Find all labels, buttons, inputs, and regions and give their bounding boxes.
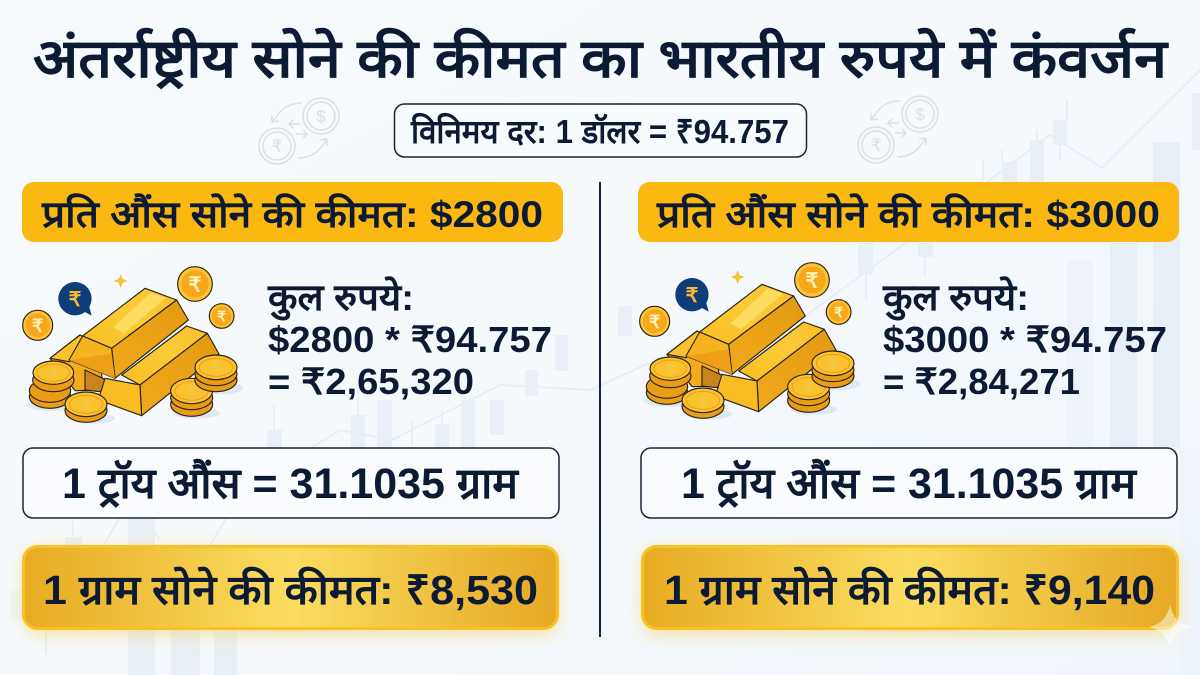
icon: gold bars and coins: ₹ xyxy=(805,269,819,292)
icon: currency exchange right: ₹ xyxy=(871,136,881,155)
text block: total rupees xyxy=(882,276,1167,402)
text block: total rupees: $3000 * ₹94.757 xyxy=(883,319,1167,360)
icon: gold bars and coins: ₹ xyxy=(649,312,661,332)
troy ounce box xyxy=(641,448,1177,518)
icon: gold bars and coins: ₹ xyxy=(32,316,44,336)
heading: price per ounce $2800: प्रति औंस सोने की कीमत: $2800 xyxy=(41,193,543,235)
heading: price per ounce $3000 xyxy=(638,182,1179,242)
icon: gold bars and coins: $ xyxy=(699,393,707,409)
icon: gold bars and coins: ₹ xyxy=(686,285,699,307)
icon: currency exchange right: $ xyxy=(915,105,925,124)
troy ounce box: 1 ट्रॉय औंस = 31.1035 ग्राम xyxy=(62,458,519,508)
icon: sparkle watermark xyxy=(1149,605,1192,647)
icon: gold bars and coins: $ xyxy=(49,366,57,382)
troy ounce box xyxy=(23,448,559,518)
icon: gold bars and coins: $ xyxy=(666,362,674,378)
panel: left $2800 xyxy=(22,182,563,634)
icon: gold bars and coins: ₹ xyxy=(69,289,82,311)
icon: gold bars and coins: ₹ xyxy=(217,310,227,326)
result: price per gram xyxy=(24,546,558,634)
icon: gold bars and coins: $ xyxy=(805,380,813,396)
text block: total rupees: = ₹2,84,271 xyxy=(883,361,1080,402)
exchange rate box: विनिमय दर: 1 डॉलर = ₹94.757 xyxy=(410,112,789,150)
text block: total rupees: कुल रुपये: xyxy=(267,276,414,321)
icon: gold bars and coins: $ xyxy=(188,384,196,400)
text block: total rupees xyxy=(267,276,552,402)
heading: price per ounce $2800 xyxy=(22,182,563,242)
icon: gold bars and coins xyxy=(640,263,860,420)
icon: gold bars and coins xyxy=(23,267,243,424)
icon: gold bars and coins: $ xyxy=(82,397,90,413)
icon: currency exchange left: ₹ xyxy=(272,137,282,156)
result: price per gram: 1 ग्राम सोने की कीमत: ₹8,530 xyxy=(43,566,538,613)
heading: price per ounce $3000: प्रति औंस सोने की कीमत: $3000 xyxy=(656,193,1160,235)
icon: gold bars and coins: ₹ xyxy=(834,306,844,322)
panel: right $3000 xyxy=(638,182,1179,634)
text block: total rupees: = ₹2,65,320 xyxy=(268,361,474,402)
troy ounce box: 1 ट्रॉय औंस = 31.1035 ग्राम xyxy=(681,458,1137,508)
result: price per gram: 1 ग्राम सोने की कीमत: ₹9,140 xyxy=(664,566,1155,613)
exchange rate box xyxy=(394,104,806,157)
icon: gold bars and coins: ₹ xyxy=(188,273,202,296)
icon: currency exchange left xyxy=(259,98,339,164)
icon: gold bars and coins: $ xyxy=(829,356,837,372)
text block: total rupees: कुल रुपये: xyxy=(882,276,1029,321)
icon: gold bars and coins: $ xyxy=(212,360,220,376)
divider xyxy=(599,182,601,637)
title: अंतर्राष्ट्रीय सोने की कीमत का भारतीय रुपये में कंवर्जन xyxy=(33,27,1169,90)
text block: total rupees: $2800 * ₹94.757 xyxy=(268,319,552,360)
icon: currency exchange left: $ xyxy=(316,107,326,126)
result: price per gram xyxy=(642,546,1178,634)
icon: currency exchange right xyxy=(858,96,938,163)
